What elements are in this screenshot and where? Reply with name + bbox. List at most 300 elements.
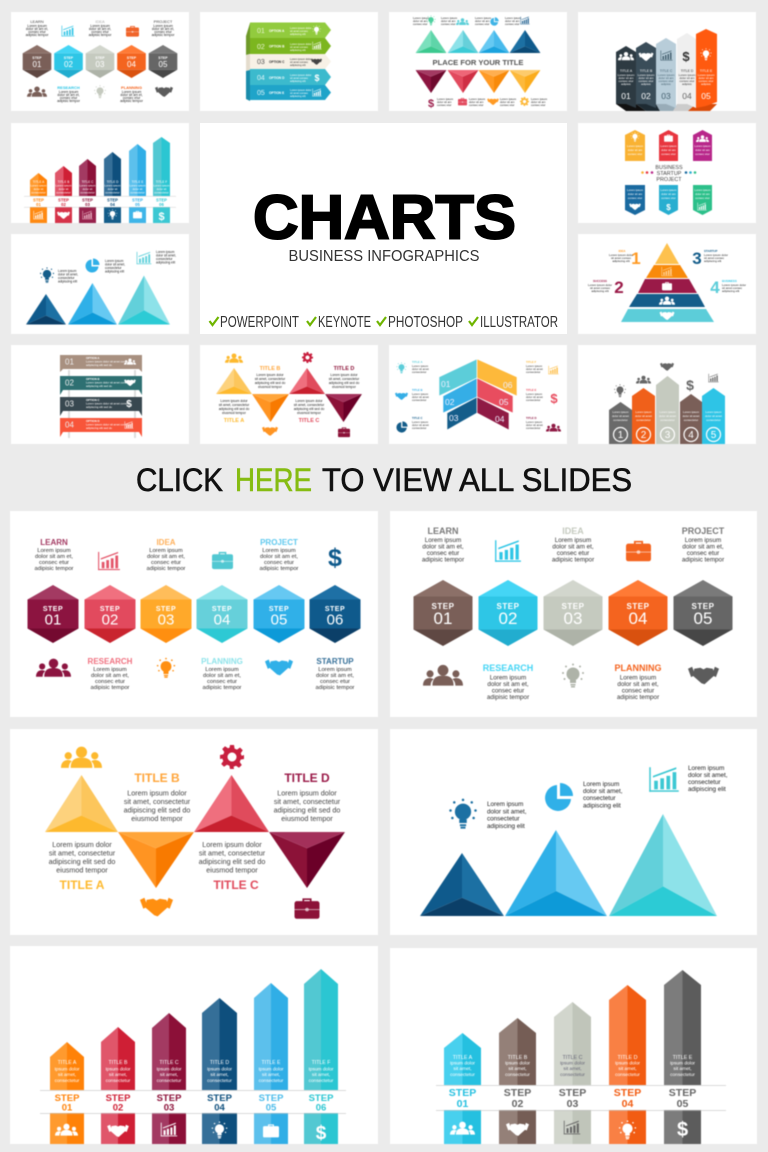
- pyramid text: sit amet consec: [722, 286, 743, 290]
- top text: adipisic tempor: [34, 566, 74, 572]
- bottom labels and text: RESEARCH: [57, 85, 80, 90]
- chevron text: consectetur: [526, 370, 541, 374]
- band icons: [124, 358, 136, 429]
- bottom text: dolor sit am et,: [91, 673, 129, 679]
- pyramid numbers: [614, 249, 720, 297]
- chevron text: Lorem ipsum: [526, 420, 543, 424]
- chevron text: dolor sit amet: [412, 423, 429, 427]
- arrow captions: TITLE E: [261, 1060, 281, 1066]
- chevron text: dolor sit amet: [412, 395, 429, 399]
- pyramid numbers: 2: [614, 278, 624, 297]
- mountain captions: dolor sit amet,: [156, 254, 176, 258]
- top text: consec etur: [264, 560, 294, 566]
- captions: consectetur: [487, 816, 520, 822]
- chevron text: TITLE E: [526, 388, 537, 392]
- bottom text: adipisic tempor: [90, 685, 130, 691]
- column text: [618, 69, 715, 101]
- zigzag text: sit amet, consectetur: [255, 377, 286, 381]
- bottom tag icons and text: Lorem ipsum: [694, 188, 711, 192]
- bottom text: dolor sit am et,: [617, 681, 659, 688]
- arrow text: [612, 410, 722, 422]
- block icons: [55, 1121, 327, 1144]
- hexagon labels: STEP: [158, 56, 168, 60]
- arrow text: Lorem ipsum: [705, 410, 722, 414]
- step labels: 04: [622, 1098, 633, 1110]
- top labels and text: consec etur: [91, 30, 110, 34]
- ribbon text: adipiscing elit: [290, 48, 306, 52]
- hexagon step labels: STEP: [269, 606, 289, 613]
- arrow captions: sit amet,: [618, 1066, 637, 1072]
- triangles: [420, 814, 717, 916]
- hexagon step labels: STEP: [212, 606, 232, 613]
- bottom labels and text: dolor sit am et,: [120, 93, 143, 97]
- arrow captions: consectetur: [450, 1072, 475, 1078]
- zigzag text: adipiscing elit sed do: [255, 381, 285, 385]
- triangles: [45, 775, 345, 888]
- titles: TITLE D: [284, 771, 330, 785]
- captions: consectetur: [583, 795, 616, 802]
- chevron text: Lorem ipsum: [526, 392, 543, 396]
- column text: TITLE D: [681, 69, 694, 73]
- bottom labels: PLANNING: [201, 657, 243, 666]
- column text: dolor sit am: [659, 76, 674, 80]
- captions: adipiscing elit: [688, 786, 726, 793]
- panel: three mountains: [390, 729, 757, 935]
- arrow captions: dolor sit: [83, 187, 93, 191]
- hexagon step labels: STEP: [692, 602, 715, 611]
- icon: bulb: [94, 85, 106, 98]
- hexagon step labels: 04: [629, 609, 647, 628]
- hexagon step labels: 02: [102, 612, 118, 628]
- arrow captions: consectetur: [309, 1078, 334, 1084]
- body text: sit amet, consectetur: [199, 848, 266, 858]
- top labels and text: Lorem ipsum: [27, 24, 47, 28]
- bottom text: Lorem ipsum: [318, 667, 352, 673]
- hexagon step labels: STEP: [100, 606, 120, 613]
- hexagon labels: 01: [33, 60, 42, 69]
- bottom labels and text: consec etur: [123, 96, 141, 100]
- chevron numbers: 05: [499, 397, 509, 407]
- body text: Lorem ipsum dolor: [202, 840, 262, 849]
- ribbon text: 04: [257, 75, 265, 82]
- block icons: $: [316, 1123, 327, 1144]
- panel: thumbnail hexagon columns: [578, 12, 756, 111]
- bottom labels: [88, 657, 354, 666]
- pyramid text: sit amet consec: [611, 256, 632, 260]
- column text: Lorem ipsum: [658, 73, 675, 77]
- column text: 02: [641, 91, 651, 101]
- column text: dolor sit am: [619, 76, 634, 80]
- ribbon text: Lorem ipsum dolor: [290, 57, 312, 61]
- bottom tag icons and text: Lorem ipsum: [660, 188, 677, 192]
- hexagon step labels: STEP: [627, 602, 650, 611]
- chevron bands: [439, 359, 517, 430]
- arrow captions: consectetur: [56, 190, 71, 194]
- bottom text: consec etur: [500, 103, 515, 107]
- column text: 05: [701, 91, 711, 101]
- top text: [34, 548, 299, 572]
- icon: bulb: [449, 799, 477, 829]
- chevron text: Lorem ipsum: [412, 392, 429, 396]
- arrow icons: $: [686, 377, 694, 393]
- title: PLACE FOR YOUR TITLE: [432, 60, 524, 67]
- band text: OPTION D: [86, 419, 100, 423]
- top labels: IDEA: [562, 526, 584, 536]
- panel: thumbnail zigzag triangles: [200, 345, 378, 444]
- arrow captions: TITLE D: [617, 1055, 638, 1061]
- arrow text: Lorem ipsum: [659, 410, 676, 414]
- bottom text: Lorem ipsum: [500, 97, 517, 101]
- step labels: [33, 198, 167, 207]
- step labels: 06: [316, 1102, 326, 1114]
- column text: TITLE E: [700, 69, 713, 73]
- arrow captions: Ipsum dolor: [54, 1066, 80, 1072]
- icon: pie: [86, 258, 100, 272]
- software list: PHOTOSHOP: [388, 314, 463, 331]
- mountain captions: adipiscing elit: [156, 260, 175, 264]
- arrow captions: consectetur: [505, 1072, 530, 1078]
- ribbon text: 02: [257, 44, 265, 51]
- top tags: [625, 130, 712, 161]
- chevron icons: $: [550, 391, 558, 406]
- bottom text: [90, 667, 355, 691]
- arrow captions: Ipsum dolor: [308, 1066, 334, 1072]
- step labels: 06: [159, 202, 164, 207]
- ribbon text: sit amet consec: [290, 60, 309, 64]
- up triangles: [416, 30, 540, 53]
- top text: dolor sit am et,: [260, 554, 298, 560]
- step labels: STEP: [614, 1087, 641, 1099]
- bottom tag icons and text: consec etur: [661, 196, 676, 200]
- top text: [413, 16, 522, 26]
- bottom text: Lorem ipsum: [531, 97, 548, 101]
- zigzag icons: [225, 352, 350, 437]
- top text: dolor sit am: [413, 19, 428, 23]
- band numbers: [65, 358, 74, 430]
- ribbon text: Lorem ipsum dolor: [290, 26, 312, 30]
- chevron text: consectetur: [412, 370, 427, 374]
- ribbon text: sit amet consec: [290, 91, 309, 95]
- ribbon text: adipiscing elit: [290, 79, 306, 83]
- step labels: [55, 1093, 334, 1114]
- bottom text: dolor sit am: [437, 100, 452, 104]
- top text: adipisic tempor: [552, 556, 594, 564]
- ribbon text: [257, 26, 312, 98]
- zigzag text: Lorem ipsum dolor: [256, 373, 285, 377]
- chevron numbers: 06: [503, 380, 513, 390]
- zigzag text: Lorem ipsum dolor: [220, 399, 249, 403]
- arrow captions: TITLE F: [156, 180, 167, 184]
- top text: dolor sit am: [475, 19, 490, 23]
- top text: dolor sit am: [505, 19, 520, 23]
- bottom text: adipisic tempor: [617, 694, 659, 701]
- arrow numbers: 1: [618, 430, 624, 441]
- bottom text: consec etur: [320, 679, 350, 685]
- arrow captions: Lorem ipsum: [79, 184, 96, 188]
- bottom icons: $: [428, 98, 434, 110]
- arrow text: consectetur: [706, 418, 721, 422]
- top text: consec etur: [413, 22, 428, 26]
- chevron text: TITLE C: [412, 416, 423, 420]
- panel: thumbnail option bands: [11, 345, 189, 444]
- bottom labels and text: PLANNING: [121, 85, 142, 90]
- step labels: STEP: [259, 1093, 284, 1104]
- bottom text: adipisic tempor: [487, 694, 529, 701]
- bottom tag icons and text: [627, 188, 711, 212]
- block icons: [450, 1119, 688, 1141]
- top labels and text: IDEA: [95, 19, 105, 24]
- top text: dolor sit am: [441, 19, 456, 23]
- ribbon text: adipiscing elit: [290, 63, 306, 67]
- top tag icons and text: consec etur: [695, 152, 710, 156]
- pyramid numbers: 4: [710, 278, 720, 297]
- arrow captions: TITLE E: [673, 1055, 693, 1061]
- band shadows: [436, 1085, 726, 1111]
- top text: adipisic tempor: [682, 556, 724, 564]
- arrow captions: Lorem ipsum: [153, 184, 170, 188]
- top text: [422, 537, 724, 564]
- hexagon step labels: STEP: [432, 602, 455, 611]
- arrow text: consectetur: [660, 418, 675, 422]
- band text: [86, 356, 130, 430]
- pyramid layers: [621, 243, 714, 322]
- column text: TITLE C: [660, 69, 673, 73]
- call to action heading: CLICK: [136, 462, 223, 498]
- icon: gear: [220, 745, 244, 769]
- body text: eiusmod tempor: [281, 814, 333, 823]
- body text: Lorem ipsum dolor: [277, 788, 337, 798]
- arrow captions: Ipsum dolor: [105, 1066, 131, 1072]
- band numbers: 03: [65, 400, 74, 408]
- zigzag titles: TITLE B: [260, 366, 280, 372]
- band text: adipiscing elit sed do: [86, 384, 112, 388]
- arrow captions: TITLE A: [453, 1055, 473, 1061]
- arrow captions: consectetur: [106, 1078, 131, 1084]
- top tag icons and text: Lorem ipsum: [694, 144, 711, 148]
- triangles: [26, 276, 170, 324]
- arrows: [50, 969, 338, 1090]
- column text: TITLE B: [640, 69, 653, 73]
- titles: TITLE B: [134, 771, 180, 785]
- chevron numbers: 02: [445, 397, 455, 407]
- bottom text: consec etur: [207, 679, 237, 685]
- top labels: PROJECT: [682, 526, 725, 536]
- bottom text: Lorem ipsum: [620, 674, 656, 682]
- hexagon labels: [32, 56, 168, 69]
- band text: Lorem ipsum dolor sit amet consec: [86, 380, 130, 384]
- top labels: IDEA: [156, 538, 176, 547]
- arrow captions: Lorem ipsum: [55, 184, 72, 188]
- arrow text: dolor sit amet: [683, 414, 700, 418]
- bottom text: adipisic tempor: [202, 685, 242, 691]
- captions: [487, 765, 728, 830]
- column text: 03: [661, 91, 671, 101]
- bottom text: [437, 97, 548, 107]
- chevron icons: [395, 362, 561, 433]
- icon: chart: [137, 252, 151, 264]
- icon: pie: [545, 783, 573, 811]
- hexagon step labels: STEP: [43, 606, 63, 613]
- mountain captions: [58, 250, 176, 284]
- software list: POWERPOINT: [220, 314, 299, 331]
- subheading: BUSINESS INFOGRAPHICS: [288, 248, 480, 265]
- arrow captions: consectetur: [130, 190, 145, 194]
- band supports: [68, 370, 136, 438]
- body text: eiusmod tempor: [131, 814, 183, 823]
- zigzag titles: TITLE D: [334, 366, 354, 372]
- column icons: $: [682, 49, 690, 64]
- column text: adipisic: [641, 82, 651, 86]
- top labels: PROJECT: [260, 538, 298, 547]
- hexagon step labels: STEP: [562, 602, 585, 611]
- arrow captions: sit amet,: [160, 1072, 178, 1078]
- columns: [616, 29, 717, 108]
- top labels and text: dolor sit am et,: [89, 27, 111, 31]
- top text: consec etur: [475, 22, 490, 26]
- arrow captions: [450, 1055, 695, 1078]
- top text: consec etur: [39, 560, 69, 566]
- top text: Lorem ipsum: [505, 16, 522, 20]
- icon: handshake: [265, 660, 293, 675]
- icon: bulb: [562, 664, 584, 688]
- bottom labels and text: adipisic tempor: [120, 99, 144, 103]
- mountain captions: consectetur: [105, 266, 122, 270]
- panel: five hexagon steps: [390, 511, 757, 717]
- down triangles: [416, 70, 540, 93]
- top labels and text: dolor sit am et,: [152, 27, 174, 31]
- step labels: 01: [62, 1102, 73, 1114]
- band text: Lorem ipsum dolor sit amet consec: [86, 422, 130, 426]
- mountain captions: consectetur: [156, 257, 173, 261]
- bottom tag icons and text: dolor sit am: [661, 192, 676, 196]
- arrow captions: TITLE C: [159, 1060, 179, 1066]
- top text: consec etur: [427, 550, 459, 557]
- titles: TITLE C: [213, 878, 259, 892]
- panel: zigzag triangles: [10, 729, 378, 935]
- bottom labels and text: adipisic tempor: [57, 99, 81, 103]
- zigzag titles: TITLE C: [299, 418, 319, 424]
- arrow captions: dolor sit: [34, 187, 44, 191]
- step labels: STEP: [559, 1087, 586, 1099]
- bottom labels: RESEARCH: [88, 657, 133, 666]
- arrow captions: Ipsum dolor: [560, 1060, 585, 1066]
- arrow captions: Ipsum dolor: [450, 1060, 475, 1066]
- top text: adipisic tempor: [146, 566, 186, 572]
- bottom text: Lorem ipsum: [93, 667, 127, 673]
- icon: chart: [649, 767, 679, 792]
- bottom text: consec etur: [531, 103, 546, 107]
- panel: five rising arrows: [390, 948, 757, 1144]
- step labels: STEP: [106, 1093, 131, 1104]
- panel: thumbnail three mountains: [11, 234, 189, 334]
- bottom text: consec etur: [622, 688, 654, 694]
- arrow captions: TITLE C: [82, 180, 94, 184]
- top labels: LEARN: [428, 526, 458, 536]
- bottom tag icons and text: dolor sit am: [628, 192, 643, 196]
- top text: Lorem ipsum: [441, 16, 458, 20]
- bottom labels and text: [57, 85, 144, 103]
- step labels: STEP: [309, 1093, 334, 1104]
- top text: Lorem ipsum: [413, 16, 430, 20]
- ribbon text: OPTION A: [269, 29, 285, 33]
- top text: dolor sit am et,: [35, 554, 73, 560]
- column text: consec etur: [619, 79, 634, 83]
- top text: dolor sit am et,: [682, 544, 724, 550]
- pyramid text: IDEA: [619, 249, 626, 253]
- body text: sit amet, consectetur: [49, 848, 116, 858]
- arrow captions: Lorem ipsum: [104, 184, 121, 188]
- ribbon text: OPTION E: [269, 91, 284, 95]
- chevron text: TITLE A: [412, 360, 422, 364]
- arrow captions: TITLE A: [33, 180, 45, 184]
- panel: thumbnail ribbon options: [200, 12, 378, 111]
- arrow captions: consectetur: [105, 190, 120, 194]
- icon: handshake: [140, 898, 173, 916]
- top labels and text: dolor sit am et,: [26, 27, 48, 31]
- bottom labels: STARTUP: [316, 657, 354, 666]
- bottom text: dolor sit am: [469, 100, 484, 104]
- arrow captions: sit amet,: [312, 1072, 330, 1078]
- pyramid icons: [659, 267, 675, 320]
- pyramid text: adipiscing elit: [704, 259, 722, 263]
- hexagon labels: STEP: [95, 56, 105, 60]
- step labels: 01: [457, 1098, 468, 1110]
- hexagon step labels: 03: [564, 609, 582, 628]
- chevron text: TITLE F: [526, 360, 537, 364]
- bottom tag icons and text: dolor sit am: [695, 192, 710, 196]
- bottom text: Lorem ipsum: [205, 667, 239, 673]
- center label: BUSINESS: [655, 165, 683, 171]
- icon: briefcase: [126, 26, 139, 37]
- arrow captions: TITLE F: [312, 1060, 330, 1066]
- arrow captions: sit amet,: [563, 1066, 582, 1072]
- chevron text: Lorem ipsum: [412, 420, 429, 424]
- top text: Lorem ipsum: [37, 548, 71, 554]
- mountain captions: Lorem ipsum: [58, 269, 77, 273]
- step labels: STEP: [58, 198, 69, 202]
- ribbon text: Lorem ipsum dolor: [290, 42, 312, 46]
- band text: OPTION C: [86, 398, 100, 402]
- ribbon rows: [250, 22, 331, 100]
- hexagon labels: 04: [127, 60, 136, 69]
- captions: Lorem ipsum: [487, 801, 523, 808]
- top labels and text: adipisic tempor: [26, 33, 49, 37]
- icon: bulb: [157, 658, 175, 678]
- step labels: STEP: [207, 1093, 233, 1104]
- mountain captions: dolor sit amet,: [105, 262, 125, 266]
- bottom text: adipisic tempor: [316, 685, 355, 691]
- bottom labels: [483, 663, 662, 673]
- arrow captions: consectetur: [259, 1078, 284, 1084]
- center label: STARTUP: [657, 171, 682, 177]
- titles: TITLE A: [60, 878, 105, 892]
- zigzag text: sit amet, consectetur: [219, 403, 250, 407]
- arrow text: dolor sit amet: [705, 414, 722, 418]
- zigzag text: sit amet, consectetur: [294, 403, 325, 407]
- column feet: [616, 104, 717, 111]
- icon squares: [30, 207, 170, 223]
- step labels: STEP: [156, 198, 167, 202]
- hexagon step labels: 06: [327, 612, 343, 628]
- hexagon step labels: [43, 606, 345, 628]
- panel: thumbnail chevrons: [389, 345, 567, 444]
- ribbon text: adipiscing elit: [290, 32, 306, 36]
- top text: consec etur: [441, 22, 456, 26]
- column text: TITLE A: [620, 69, 633, 73]
- body text: eiusmod tempor: [206, 866, 258, 874]
- panel: thumbnail rising arrows: [11, 123, 189, 223]
- body text: eiusmod tempor: [56, 866, 108, 874]
